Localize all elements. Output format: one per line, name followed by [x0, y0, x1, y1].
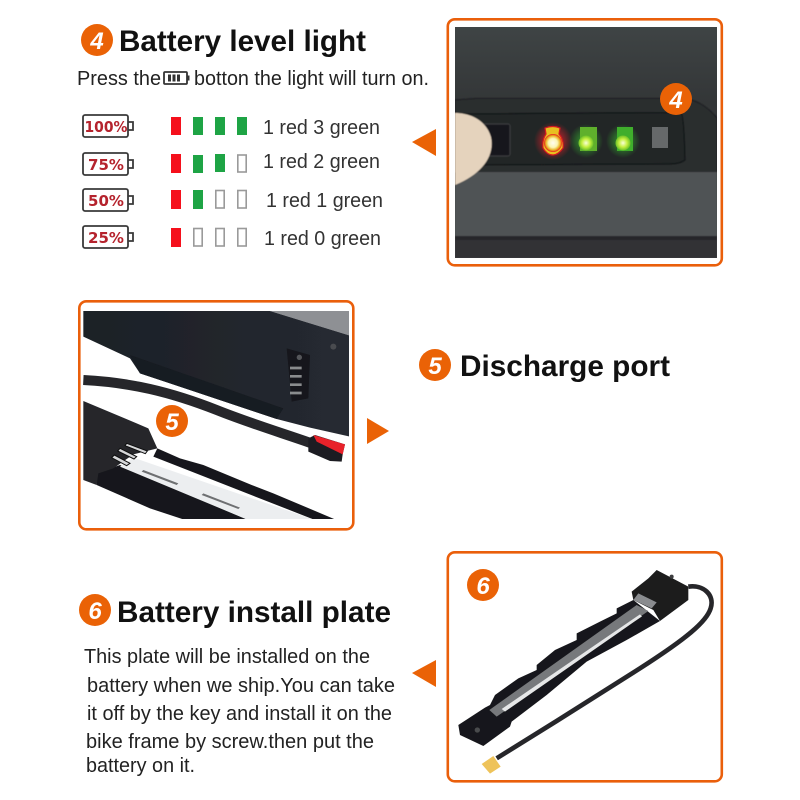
photo: battery bottom, cable and plate connector [83, 311, 350, 521]
section 5 heading: 5 [428, 353, 442, 380]
panel: battery level light photo [448, 19, 722, 265]
section 4 heading: Battery level light [119, 25, 366, 58]
number badge 5: 5 [165, 409, 179, 436]
panel: battery install plate photo [448, 552, 722, 781]
row: 100 percent: 1 red 3 green [263, 117, 380, 139]
arrow pointing to photo 4 section [412, 129, 436, 156]
install plate description: battery when we ship.You can take [87, 675, 395, 697]
section 6 heading: Battery install plate [117, 596, 391, 629]
row: 50 percent: 1 red 1 green [266, 190, 383, 212]
row: 25 percent [83, 226, 381, 250]
number badge 5 [156, 405, 188, 437]
arrow pointing to discharge port text [367, 418, 389, 444]
section 4 heading: 4 [89, 28, 104, 55]
number badge 6 [467, 569, 499, 601]
row: 25 percent: 1 red 0 green [264, 228, 381, 250]
row: 100 percent [83, 115, 380, 139]
section 6 heading: 6 [88, 598, 102, 625]
install plate description: This plate will be installed on the [84, 646, 370, 668]
row: 25 percent: 25% [88, 229, 124, 247]
arrow pointing to install plate photo [412, 660, 436, 687]
photo: light panel with LEDs [455, 27, 717, 258]
row: 50 percent: 50% [88, 192, 124, 210]
instruction text with battery button icon: botton the light will turn on. [194, 68, 429, 90]
photo: install plate with cable [458, 570, 712, 774]
number badge 4: 4 [668, 87, 683, 114]
row: 75 percent: 1 red 2 green [263, 151, 380, 173]
section 5 heading: Discharge port [460, 350, 670, 383]
row: 50 percent [83, 189, 383, 212]
install plate description: it off by the key and install it on the [87, 703, 392, 725]
number badge 4 [660, 83, 692, 115]
panel: discharge port photo [79, 301, 353, 529]
install plate description: bike frame by screw.then put the [86, 731, 374, 753]
row: 100 percent: 100% [84, 118, 128, 136]
instruction text with battery button icon [77, 68, 429, 90]
row: 75 percent: 75% [88, 156, 124, 174]
install plate description: battery on it. [86, 755, 195, 777]
row: 75 percent [83, 151, 380, 175]
number badge 6: 6 [476, 573, 490, 600]
instruction text with battery button icon: Press the [77, 68, 161, 90]
install plate description [84, 646, 395, 777]
battery level table [83, 115, 383, 250]
